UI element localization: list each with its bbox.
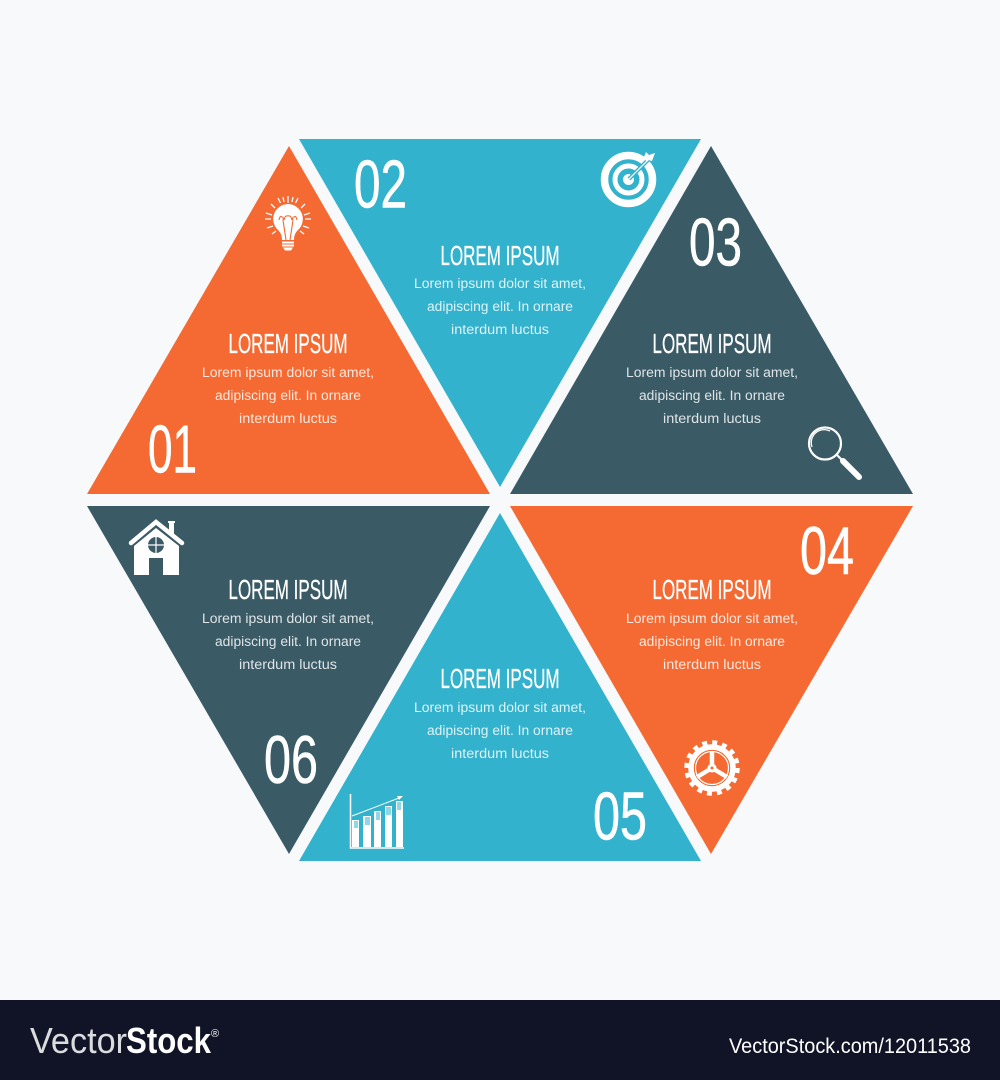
heading 01: LOREM IPSUM (228, 328, 348, 359)
icon: house (131, 521, 182, 575)
icon: magnifying glass (809, 428, 859, 477)
body text 02 (414, 276, 586, 337)
body text 05: adipiscing elit. In ornare (427, 723, 573, 738)
body text 02: interdum luctus (451, 322, 549, 337)
body text 04: Lorem ipsum dolor sit amet, (626, 611, 798, 626)
footer url: VectorStock.com/12011538 (729, 1035, 971, 1058)
number 05: 05 (593, 778, 647, 854)
body text 05: interdum luctus (451, 746, 549, 761)
number 06: 06 (264, 722, 318, 798)
number 03: 03 (689, 204, 742, 280)
panel 03: dark triangle (510, 146, 913, 494)
body text 06: Lorem ipsum dolor sit amet, (202, 611, 374, 626)
footer bar (0, 1000, 1000, 1080)
panel 04: orange triangle (510, 506, 913, 854)
body text 03: interdum luctus (663, 411, 761, 426)
icon: bar chart with arrow (350, 794, 404, 848)
icon: gear (687, 743, 737, 793)
heading 05: LOREM IPSUM (440, 663, 560, 694)
body text 02: Lorem ipsum dolor sit amet, (414, 276, 586, 291)
body text 05 (414, 700, 586, 761)
panel 06: dark triangle (87, 506, 490, 854)
heading 04: LOREM IPSUM (652, 574, 772, 605)
panel 01: orange triangle (87, 146, 490, 494)
body text 05: Lorem ipsum dolor sit amet, (414, 700, 586, 715)
icon: target with arrow (604, 152, 655, 204)
body text 06: adipiscing elit. In ornare (215, 634, 361, 649)
body text 04 (626, 611, 798, 672)
footer logo: Vector (30, 1020, 127, 1061)
body text 04: interdum luctus (663, 657, 761, 672)
body text 06: interdum luctus (239, 657, 337, 672)
number 02: 02 (354, 146, 407, 222)
body text 03: adipiscing elit. In ornare (639, 388, 785, 403)
footer logo: ® (211, 1028, 219, 1040)
heading 03: LOREM IPSUM (652, 328, 772, 359)
number 01: 01 (148, 412, 197, 488)
panel 02: teal triangle (299, 139, 701, 487)
body text 04: adipiscing elit. In ornare (639, 634, 785, 649)
body text 01: Lorem ipsum dolor sit amet, (202, 365, 374, 380)
body text 01: interdum luctus (239, 411, 337, 426)
body text 01: adipiscing elit. In ornare (215, 388, 361, 403)
body text 03: Lorem ipsum dolor sit amet, (626, 365, 798, 380)
body text 06 (202, 611, 374, 672)
body text 01 (202, 365, 374, 426)
footer logo: Stock (126, 1020, 212, 1061)
heading 06: LOREM IPSUM (228, 574, 348, 605)
footer logo (30, 1020, 219, 1061)
icon: light bulb (265, 196, 311, 250)
body text 02: adipiscing elit. In ornare (427, 299, 573, 314)
heading 02: LOREM IPSUM (440, 240, 560, 271)
number 04: 04 (800, 513, 854, 589)
body text 03 (626, 365, 798, 426)
panel 05: teal triangle (299, 513, 701, 861)
